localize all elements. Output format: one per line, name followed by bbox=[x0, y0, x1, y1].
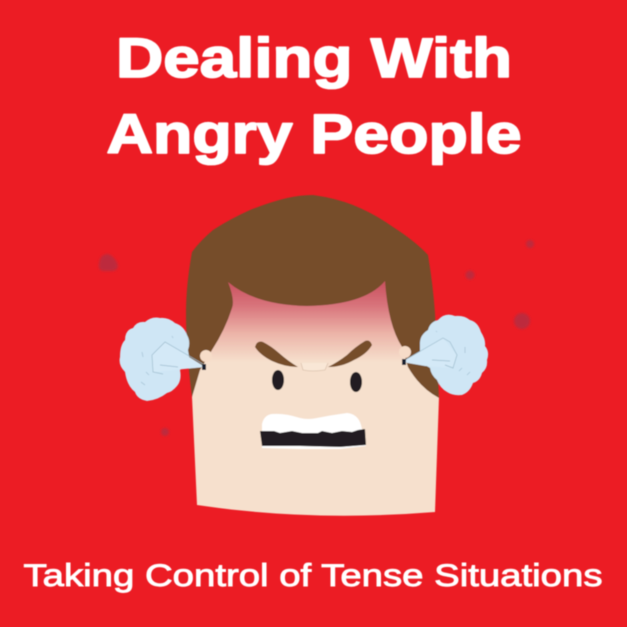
left eye bbox=[272, 370, 284, 390]
character head bbox=[120, 195, 488, 516]
title bbox=[106, 26, 522, 165]
right eyebrow bbox=[328, 340, 372, 367]
title: Angry People bbox=[106, 102, 522, 165]
right steam cloud bbox=[402, 315, 488, 395]
background specks bbox=[99, 240, 534, 436]
subtitle: Taking Control of Tense Situations bbox=[24, 557, 602, 593]
left ear bbox=[200, 350, 212, 362]
hair bbox=[186, 195, 439, 398]
face bbox=[192, 270, 439, 516]
right eye bbox=[350, 372, 362, 392]
nose bbox=[301, 363, 328, 371]
right ear bbox=[399, 346, 411, 358]
forehead flush bbox=[205, 281, 405, 362]
title: Dealing With bbox=[116, 26, 512, 89]
left eyebrow bbox=[255, 342, 298, 367]
left steam cloud bbox=[120, 318, 206, 401]
mouth bbox=[260, 413, 366, 449]
